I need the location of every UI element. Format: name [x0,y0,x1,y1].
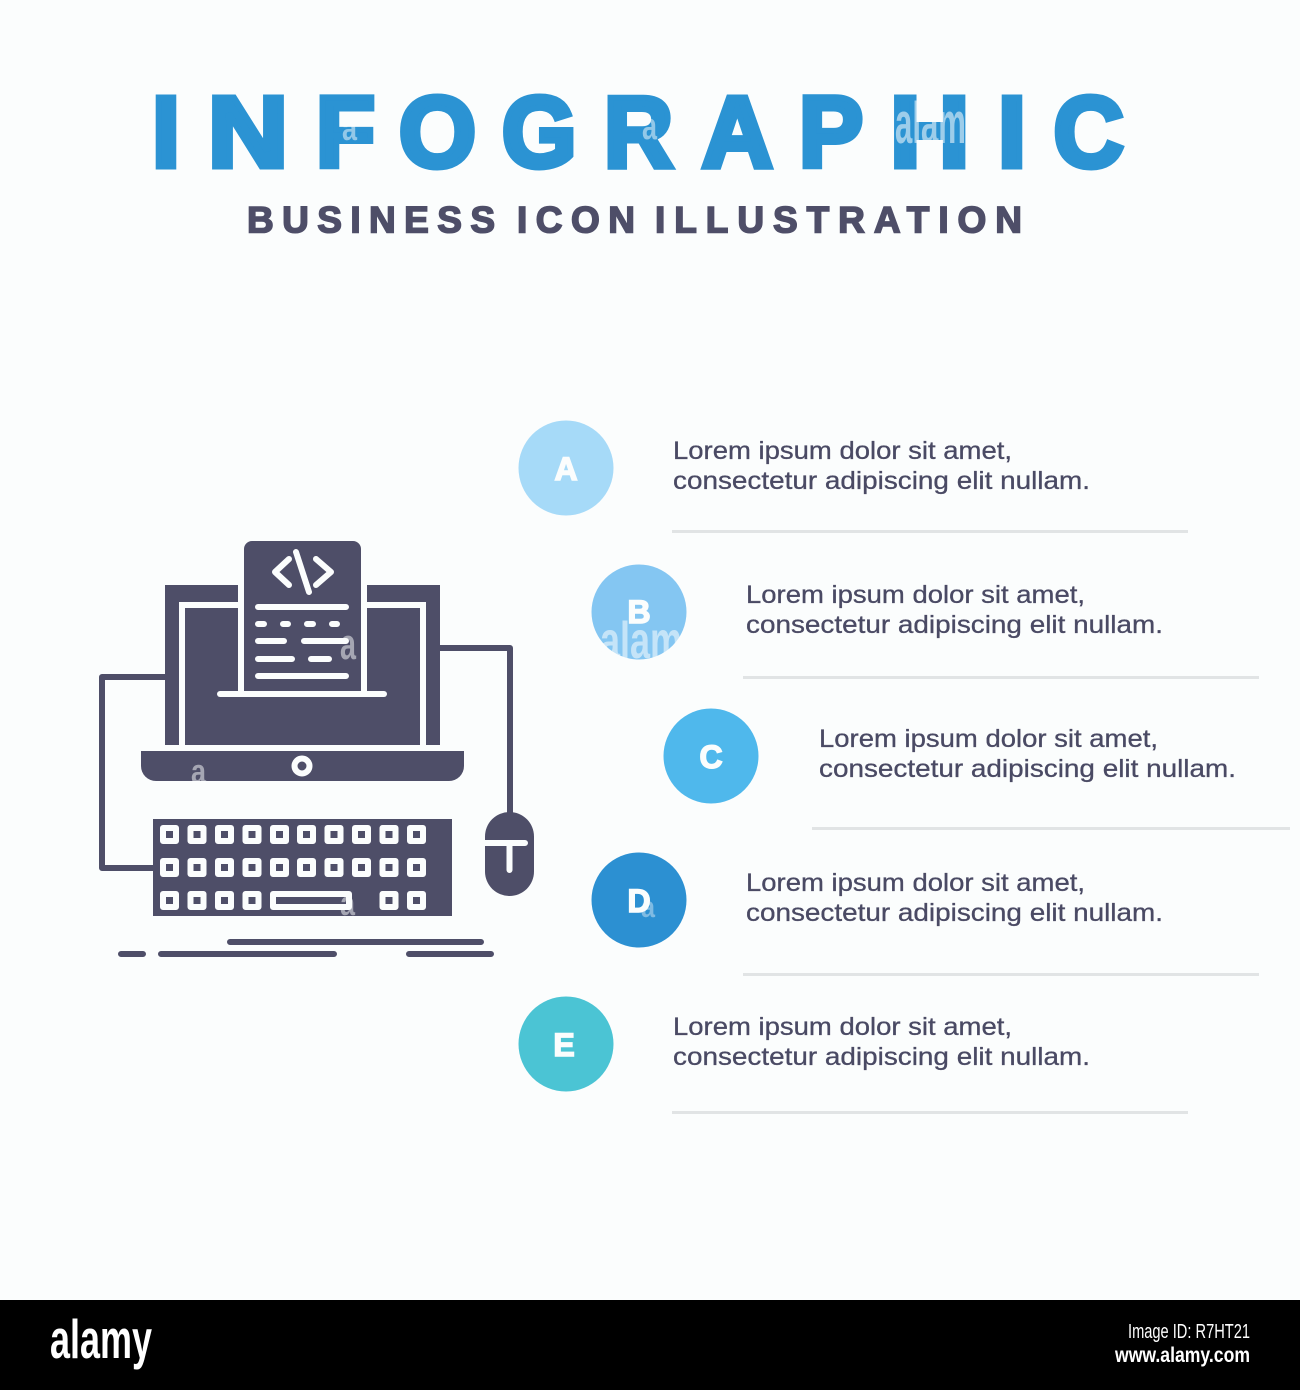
step D [592,852,1259,976]
step C [664,708,1290,830]
title: G [502,76,576,188]
text E: Lorem ipsum dolor sit amet, [673,1013,1012,1041]
title: N [208,76,288,188]
badge C: C [699,739,723,775]
badge E: E [553,1027,575,1063]
watermarks: a [191,753,207,791]
title: P [799,76,863,188]
keyboard [153,819,452,916]
title: R [604,76,673,188]
text C [819,725,1236,783]
step A [518,420,1188,533]
text B: consectetur adipiscing elit nullam. [746,611,1163,639]
subtitle: ICON [517,200,635,240]
watermarks: a [342,110,358,148]
title: O [399,76,476,188]
text A [673,437,1090,495]
laptop screen [165,585,440,745]
step B [592,564,1259,679]
text A: Lorem ipsum dolor sit amet, [673,437,1012,465]
icon: laptop with code, keyboard and mouse [102,541,534,954]
footer bar [0,1300,1300,1390]
watermarks: alam [895,91,966,156]
cable: keyboard to laptop [102,677,165,868]
cable: mouse to laptop [440,648,510,814]
title: A [702,76,773,188]
step E [518,996,1188,1114]
watermarks: a [642,106,658,148]
watermarks: alam [600,612,682,670]
text D: Lorem ipsum dolor sit amet, [746,869,1085,897]
badge A: A [554,451,578,487]
badge B [592,564,686,660]
watermarks: a [340,885,356,923]
subtitle: ILLUSTRATION [655,200,1022,240]
ground lines [121,942,491,954]
text D [746,869,1163,927]
badge D [592,852,686,948]
text C: Lorem ipsum dolor sit amet, [819,725,1158,753]
text B: Lorem ipsum dolor sit amet, [746,581,1085,609]
text E: consectetur adipiscing elit nullam. [673,1043,1090,1071]
badge D: D [627,883,651,919]
subtitle: BUSINESS [247,200,495,240]
text D: consectetur adipiscing elit nullam. [746,899,1163,927]
image id: Image ID: R7HT21 [1128,1321,1250,1343]
title: I [152,76,180,188]
badge B: B [627,594,651,630]
mouse [485,812,534,896]
badge C [664,708,758,804]
title: H [890,76,970,188]
badge A [518,420,614,516]
text E [673,1013,1090,1071]
title: F [316,76,375,188]
text B [746,581,1163,639]
laptop base [141,751,464,781]
watermarks: a [641,891,655,924]
watermarks [191,91,966,924]
code document [244,541,361,691]
title: I [998,76,1026,188]
subtitle [247,200,1022,240]
text A: consectetur adipiscing elit nullam. [673,467,1090,495]
website: www.alamy.com [1114,1344,1250,1367]
alamy logo: alamy [50,1308,152,1370]
watermarks: a [340,620,356,669]
title: C [1054,76,1124,188]
badge E [518,996,614,1092]
text C: consectetur adipiscing elit nullam. [819,755,1236,783]
